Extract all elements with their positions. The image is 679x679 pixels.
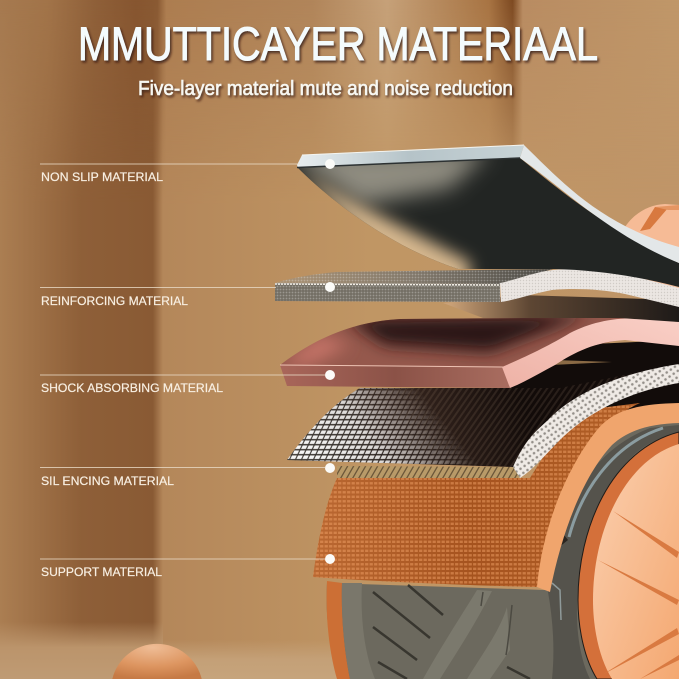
shock front face	[280, 365, 510, 388]
silencing beige underside	[337, 466, 520, 478]
non slip top edge	[297, 145, 524, 168]
hub orange ring	[578, 432, 679, 679]
reinforcing front face	[275, 283, 500, 302]
layer 3: shock absorbing material	[280, 318, 679, 388]
wheel tire	[327, 420, 679, 679]
support textured face	[313, 403, 640, 587]
reinforcing white edge	[500, 269, 679, 307]
label: support material: SUPPORT MATERIAL	[41, 565, 162, 579]
wheel rim edge	[327, 581, 350, 679]
support lit edge	[537, 403, 679, 592]
non slip side edge	[520, 145, 679, 263]
ball: background right	[616, 204, 679, 292]
subtitle: Five-layer material mute and noise reduction	[138, 78, 513, 100]
label: support material	[40, 554, 335, 579]
label: silencing material: SIL ENCING MATERIAL	[41, 474, 174, 488]
label: reinforcing material: REINFORCING MATERIAL	[41, 294, 188, 308]
silencing dark face	[287, 364, 679, 467]
wheel	[327, 420, 679, 679]
label: reinforcing material	[40, 282, 335, 308]
shock top face	[281, 318, 626, 366]
dark gap behind layers	[505, 340, 679, 430]
label: shock absorbing material	[40, 370, 335, 395]
ball: foreground bottom	[112, 644, 202, 679]
hub spokes	[598, 511, 679, 679]
layer 2: reinforcing material	[275, 269, 679, 322]
reinforcing top face	[275, 269, 553, 284]
tire highlight groove	[569, 428, 663, 537]
reinforcing under face	[443, 295, 679, 322]
hub face	[593, 444, 679, 679]
layer 1: non slip material	[285, 145, 679, 290]
label: shock absorbing material: SHOCK ABSORBING MATERIAL	[41, 381, 223, 395]
label: non slip material: NON SLIP MATERIAL	[41, 170, 163, 184]
tire tread	[342, 583, 530, 679]
silencing silver texture	[287, 388, 474, 465]
layer 4: silencing material	[287, 364, 679, 478]
shock pink edge	[502, 318, 679, 388]
label: silencing material	[40, 463, 335, 488]
title: MMUTTICAYER MATERIAAL	[78, 17, 598, 70]
tire inner dark band	[548, 425, 679, 679]
layer 5: support material	[313, 403, 679, 592]
non slip dark underside	[298, 158, 679, 287]
label: non slip material	[40, 159, 335, 184]
silencing lit edge	[513, 364, 679, 478]
groove dark wedge	[558, 530, 568, 548]
